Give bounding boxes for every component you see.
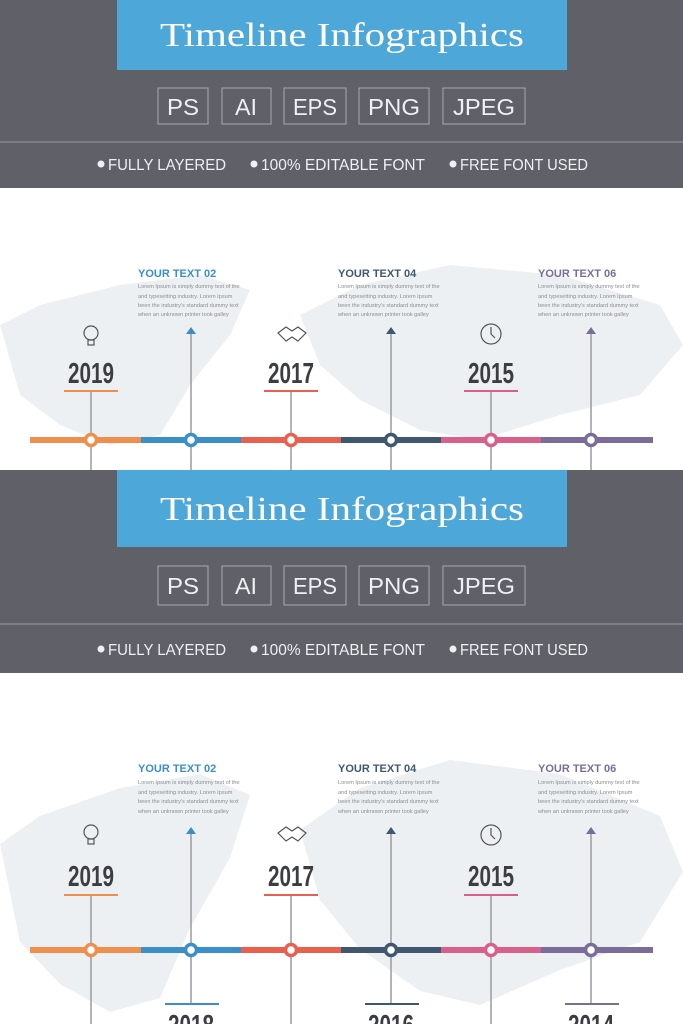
title box 2 bbox=[117, 470, 567, 547]
text blocks 2: been the industry's standard dummy text bbox=[138, 799, 239, 805]
format boxes: PNG bbox=[368, 94, 420, 120]
format boxes: AI bbox=[235, 94, 257, 120]
years 2 bbox=[64, 861, 619, 1024]
text blocks 2: YOUR TEXT 02 bbox=[138, 763, 216, 775]
format boxes 2 bbox=[158, 566, 525, 605]
text blocks 2: when an unknown printer took galley bbox=[537, 809, 629, 815]
title box bbox=[117, 0, 567, 70]
text blocks 2: Lorem Ipsum is simply dummy text of the bbox=[338, 780, 440, 786]
text blocks: Lorem Ipsum is simply dummy text of the bbox=[138, 284, 240, 290]
format boxes: PS bbox=[167, 94, 199, 120]
text blocks: when an unknown printer took galley bbox=[337, 312, 429, 318]
text blocks 2: YOUR TEXT 04 bbox=[338, 763, 417, 775]
text blocks 2: YOUR TEXT 06 bbox=[538, 763, 616, 775]
years 2: 2017 bbox=[268, 861, 314, 893]
text blocks: Lorem Ipsum is simply dummy text of the bbox=[538, 284, 640, 290]
format boxes 2: PNG bbox=[368, 573, 420, 599]
icons bbox=[84, 324, 501, 345]
years: 2015 bbox=[468, 358, 514, 390]
timeline section 2 bbox=[0, 760, 683, 1024]
text blocks 2: when an unknown printer took galley bbox=[337, 809, 429, 815]
text blocks: when an unknown printer took galley bbox=[537, 312, 629, 318]
format boxes: JPEG bbox=[453, 94, 515, 120]
text blocks: been the industry's standard dummy text bbox=[538, 303, 639, 309]
text blocks 2 bbox=[137, 763, 640, 815]
format boxes 2: JPEG bbox=[453, 573, 515, 599]
feature bullets 2: FULLY LAYERED bbox=[108, 642, 226, 659]
text blocks 2: Lorem Ipsum is simply dummy text of the bbox=[538, 780, 640, 786]
feature bullets 2 bbox=[98, 642, 588, 659]
title box 2: Timeline Infographics bbox=[160, 491, 524, 528]
feature bullets 2: FREE FONT USED bbox=[460, 642, 588, 659]
text blocks: YOUR TEXT 02 bbox=[138, 268, 216, 280]
timeline section 1 bbox=[0, 265, 683, 470]
years 2: 2019 bbox=[68, 861, 114, 893]
text blocks 2: and typesetting industry. Lorem Ipsum bbox=[138, 790, 233, 796]
text blocks bbox=[137, 268, 640, 318]
text blocks: been the industry's standard dummy text bbox=[338, 303, 439, 309]
text blocks: and typesetting industry. Lorem Ipsum bbox=[538, 294, 633, 300]
text blocks: been the industry's standard dummy text bbox=[138, 303, 239, 309]
years: 2019 bbox=[68, 358, 114, 390]
text blocks: Lorem Ipsum is simply dummy text of the bbox=[338, 284, 440, 290]
text blocks: when an unknown printer took galley bbox=[137, 312, 229, 318]
feature bullets: FREE FONT USED bbox=[460, 157, 588, 174]
timeline bar 2 bbox=[30, 944, 653, 956]
text blocks 2: and typesetting industry. Lorem Ipsum bbox=[338, 790, 433, 796]
feature bullets: 100% EDITABLE FONT bbox=[261, 157, 425, 174]
years 2: 2015 bbox=[468, 861, 514, 893]
text blocks 2: been the industry's standard dummy text bbox=[538, 799, 639, 805]
text blocks: and typesetting industry. Lorem Ipsum bbox=[138, 294, 233, 300]
text blocks: and typesetting industry. Lorem Ipsum bbox=[338, 294, 433, 300]
icons 2 bbox=[84, 825, 501, 845]
feature bullets 2: 100% EDITABLE FONT bbox=[261, 642, 425, 659]
feature bullets: FULLY LAYERED bbox=[108, 157, 226, 174]
years: 2017 bbox=[268, 358, 314, 390]
text blocks 2: been the industry's standard dummy text bbox=[338, 799, 439, 805]
header section 2 bbox=[0, 470, 683, 673]
text blocks: YOUR TEXT 04 bbox=[338, 268, 417, 280]
text blocks 2: Lorem Ipsum is simply dummy text of the bbox=[138, 780, 240, 786]
timeline bar bbox=[30, 434, 653, 446]
format boxes 2: AI bbox=[235, 573, 257, 599]
text blocks: YOUR TEXT 06 bbox=[538, 268, 616, 280]
header section 1 bbox=[0, 0, 683, 188]
title box: Timeline Infographics bbox=[160, 17, 524, 54]
stems bbox=[91, 330, 591, 470]
text blocks 2: and typesetting industry. Lorem Ipsum bbox=[538, 790, 633, 796]
format boxes 2: EPS bbox=[293, 573, 337, 599]
years bbox=[64, 358, 518, 391]
format boxes: EPS bbox=[293, 94, 337, 120]
feature bullets bbox=[98, 157, 588, 174]
stems 2 bbox=[91, 830, 591, 1024]
text blocks 2: when an unknown printer took galley bbox=[137, 809, 229, 815]
format boxes bbox=[158, 88, 525, 124]
format boxes 2: PS bbox=[167, 573, 199, 599]
